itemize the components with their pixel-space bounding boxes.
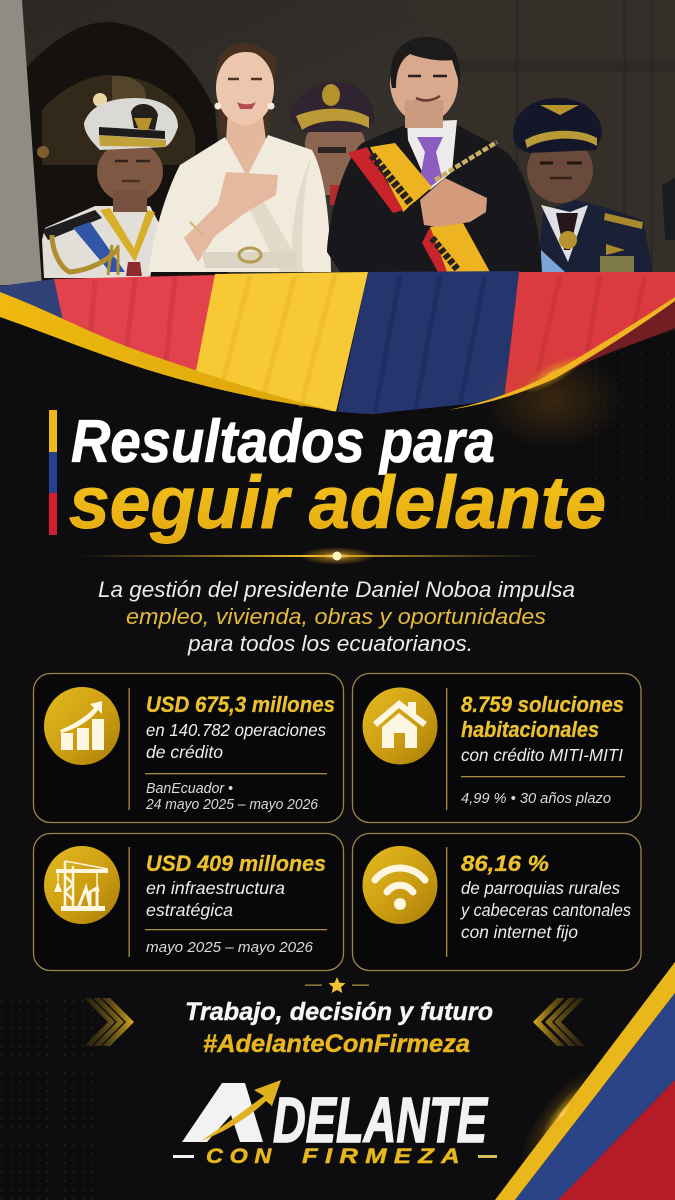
black curved panel	[0, 317, 675, 1200]
closing slogan: Trabajo, decisión y futuro	[185, 998, 493, 1026]
icon: construction crane	[44, 846, 120, 924]
closing slogan: #AdelanteConFirmeza	[203, 1030, 470, 1058]
dotted texture	[0, 350, 675, 1200]
intro text: empleo, vivienda, obras y oportunidades	[126, 604, 546, 629]
card: internet: 86,16 %	[461, 851, 549, 876]
intro text: La gestión del presidente Daniel Noboa impulsa	[98, 577, 575, 602]
card: internet: con internet fijo	[461, 922, 578, 942]
logo: Adelante con Firmeza	[173, 1080, 497, 1168]
glowing divider	[77, 547, 544, 565]
woman in white	[148, 43, 331, 272]
card: credit: de crédito	[146, 742, 223, 762]
icon: wifi	[362, 846, 438, 924]
corner flag stripes	[495, 962, 675, 1200]
intro text: para todos los ecuatorianos.	[187, 631, 473, 656]
ceiling and wall backdrop	[0, 0, 675, 300]
card: infrastructure: mayo 2025 – mayo 2026	[146, 940, 314, 956]
card: housing: 4,99 % • 30 años plazo	[461, 791, 611, 807]
star ornament	[305, 977, 369, 993]
card: internet: de parroquias rurales	[461, 878, 620, 898]
closing slogan	[185, 998, 493, 1058]
card: credit: BanEcuador •	[146, 781, 233, 797]
card: housing	[352, 674, 641, 822]
card: credit	[34, 674, 344, 822]
chevrons left	[84, 998, 134, 1046]
card: infrastructure: en infraestructura	[146, 878, 285, 898]
officer behind	[289, 82, 375, 205]
card: internet: y cabeceras cantonales	[460, 900, 631, 920]
logo: Adelante con Firmeza: FIRMEZA	[302, 1145, 467, 1168]
card: infrastructure: USD 409 millones	[146, 851, 326, 876]
card: credit: USD 675,3 millones	[146, 692, 335, 717]
gold swoosh left	[0, 292, 332, 410]
card: credit: en 140.782 operaciones	[146, 720, 326, 740]
president with sash	[327, 37, 542, 272]
title	[69, 408, 606, 544]
logo: Adelante con Firmeza: CON	[206, 1145, 278, 1168]
column	[0, 0, 42, 285]
balcony flag drape	[0, 271, 675, 418]
logo letter A with arrow	[182, 1080, 281, 1142]
intro text	[98, 577, 575, 656]
card: internet	[352, 834, 641, 970]
card: housing: 8.759 soluciones	[461, 692, 624, 717]
card: infrastructure	[34, 834, 344, 970]
icon: rising bar chart	[44, 687, 120, 765]
chevrons right	[533, 998, 585, 1046]
card: housing: habitacionales	[461, 717, 599, 742]
officer left	[42, 98, 178, 278]
lantern	[24, 22, 230, 290]
title: seguir adelante	[69, 461, 606, 544]
flag accent bar	[49, 410, 57, 535]
card: credit: 24 mayo 2025 – mayo 2026	[145, 797, 319, 813]
title: Resultados para	[71, 408, 495, 475]
hero photo: balcony	[0, 0, 675, 418]
card: housing: con crédito MITI-MITI	[461, 745, 623, 765]
gold swoosh right with glow	[448, 297, 675, 450]
card: infrastructure: estratégica	[146, 900, 233, 920]
logo: Adelante con Firmeza: DELANTE	[273, 1084, 489, 1156]
officer right	[513, 98, 675, 272]
icon: house	[362, 688, 438, 764]
